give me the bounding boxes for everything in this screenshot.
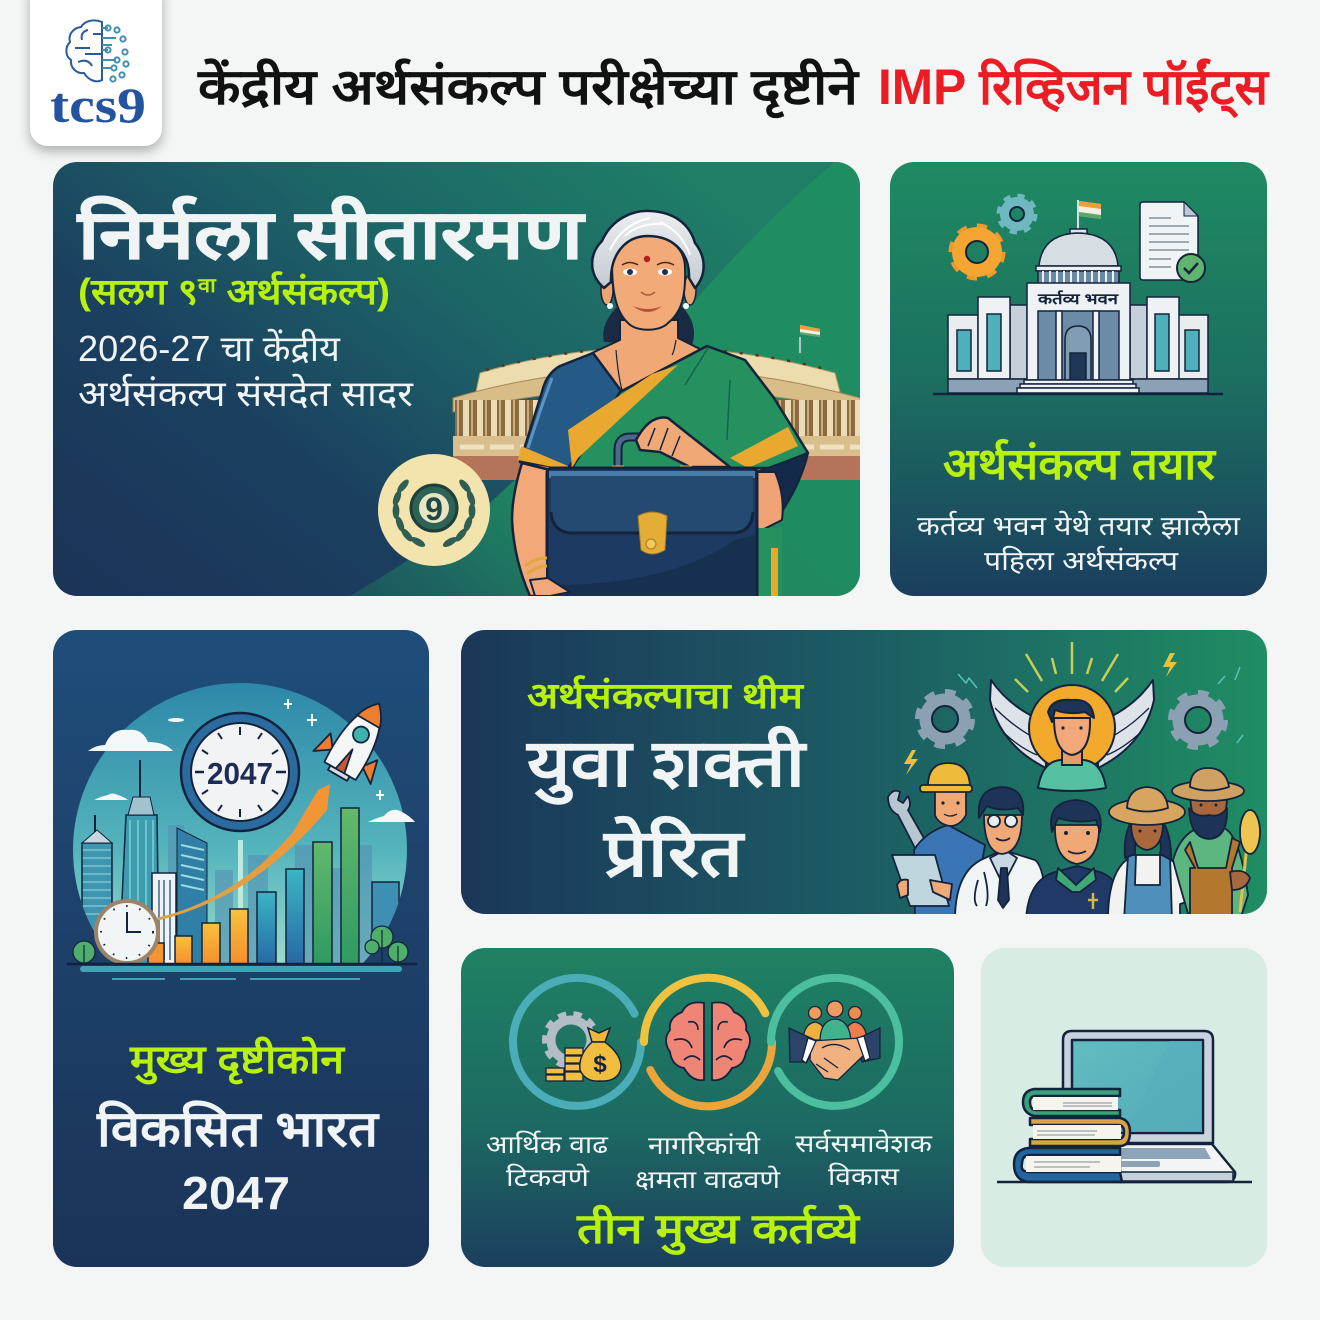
trail (156, 784, 330, 921)
icon: rays and bolts (904, 642, 1243, 775)
heading: अर्थसंकल्प तयार (943, 438, 1217, 489)
figure: doctor (955, 787, 1046, 920)
labels: duties: आर्थिक वाढ (486, 1130, 609, 1159)
text block: विकसित भारत (96, 1100, 380, 1157)
icon: stack of books (1014, 1089, 1130, 1182)
figure: woman farmer (1107, 786, 1186, 914)
icon: economy ring (513, 978, 641, 1106)
icon: handshake ring (771, 978, 899, 1106)
text block: युवा शक्ती (525, 725, 808, 805)
illustration: finance minister with briefcase (512, 211, 808, 603)
panel: theme youth power (461, 630, 1267, 920)
icon: medal 9 (378, 454, 490, 566)
text block (917, 510, 1241, 576)
text block: पहिला अर्थसंकल्प (984, 545, 1179, 576)
icon: big clock 2047 (181, 713, 299, 831)
labels: duties: विकास (828, 1162, 900, 1191)
text block: 2026-27 चा केंद्रीय (78, 328, 341, 369)
illustration: Kartavya Bhavan building (933, 200, 1223, 394)
panel: Nirmala Sitharaman (53, 162, 860, 603)
panel: budget ready (890, 162, 1267, 596)
text block (525, 725, 808, 890)
icon: rocket (309, 687, 408, 792)
icon: winged youth (990, 680, 1154, 791)
icon: trees (73, 926, 408, 964)
text block: प्रेरित (602, 815, 746, 890)
labels: duties: टिकवणे (506, 1163, 590, 1192)
heading: तीन मुख्य कर्तव्ये (576, 1204, 860, 1255)
text block: अर्थसंकल्प संसदेत सादर (78, 373, 414, 414)
labels: duties: सर्वसमावेशक (795, 1129, 933, 1158)
illustration: city, chart, rocket (67, 683, 417, 979)
icon: small clock (96, 901, 158, 963)
figure: farmer (1172, 768, 1260, 920)
labels: duties: नागरिकांची (648, 1131, 761, 1160)
text block (78, 328, 414, 414)
title: IMP रिव्हिजन पॉईंट्स (878, 58, 1270, 118)
icon: economy ring: $ (593, 1051, 607, 1078)
title: केंद्रीय अर्थसंकल्प परीक्षेच्या दृष्टीने (197, 58, 860, 119)
icon: brain ring (644, 978, 772, 1106)
text block: 2047 (182, 1167, 290, 1219)
panel: three main duties (461, 948, 954, 1267)
heading: मुख्य दृष्टीकोन (129, 1036, 346, 1085)
icon: laptop (1063, 1031, 1235, 1182)
subheading: (सलग ९ (78, 271, 188, 312)
panel: books and laptop (981, 948, 1267, 1267)
logo: tcs9: tcs9 (50, 77, 146, 133)
illustration: parliament (453, 325, 860, 480)
subheading: वा (197, 275, 217, 297)
heading: अर्थसंकल्पाचा थीम (527, 675, 805, 716)
figure: center youth (1026, 799, 1113, 914)
icon: medal 9: 9 (425, 491, 443, 527)
heading: निर्मला सीतारमण (76, 196, 586, 273)
icon: big clock 2047: 2047 (207, 756, 273, 791)
labels: duties: क्षमता वाढवणे (635, 1165, 781, 1194)
chart bars (148, 808, 359, 964)
title (197, 58, 1270, 119)
labels: duties (486, 1129, 933, 1194)
icon: gears (920, 694, 1223, 745)
icon: gears (953, 197, 1034, 276)
text block (96, 1100, 380, 1219)
icon: circuit brain (66, 20, 129, 82)
panel: main vision 2047 (53, 630, 429, 1267)
icon: clouds (88, 699, 415, 822)
illustration: Kartavya Bhavan building: कर्तव्य भवन (1037, 290, 1119, 308)
icon: document with check (1140, 202, 1205, 282)
text block: कर्तव्य भवन येथे तयार झालेला (917, 510, 1241, 541)
subheading: अर्थसंकल्प) (216, 271, 390, 312)
logo: tcs9 (30, 0, 162, 146)
figure: worker (888, 763, 985, 920)
illustration: youth and workers (888, 642, 1260, 920)
